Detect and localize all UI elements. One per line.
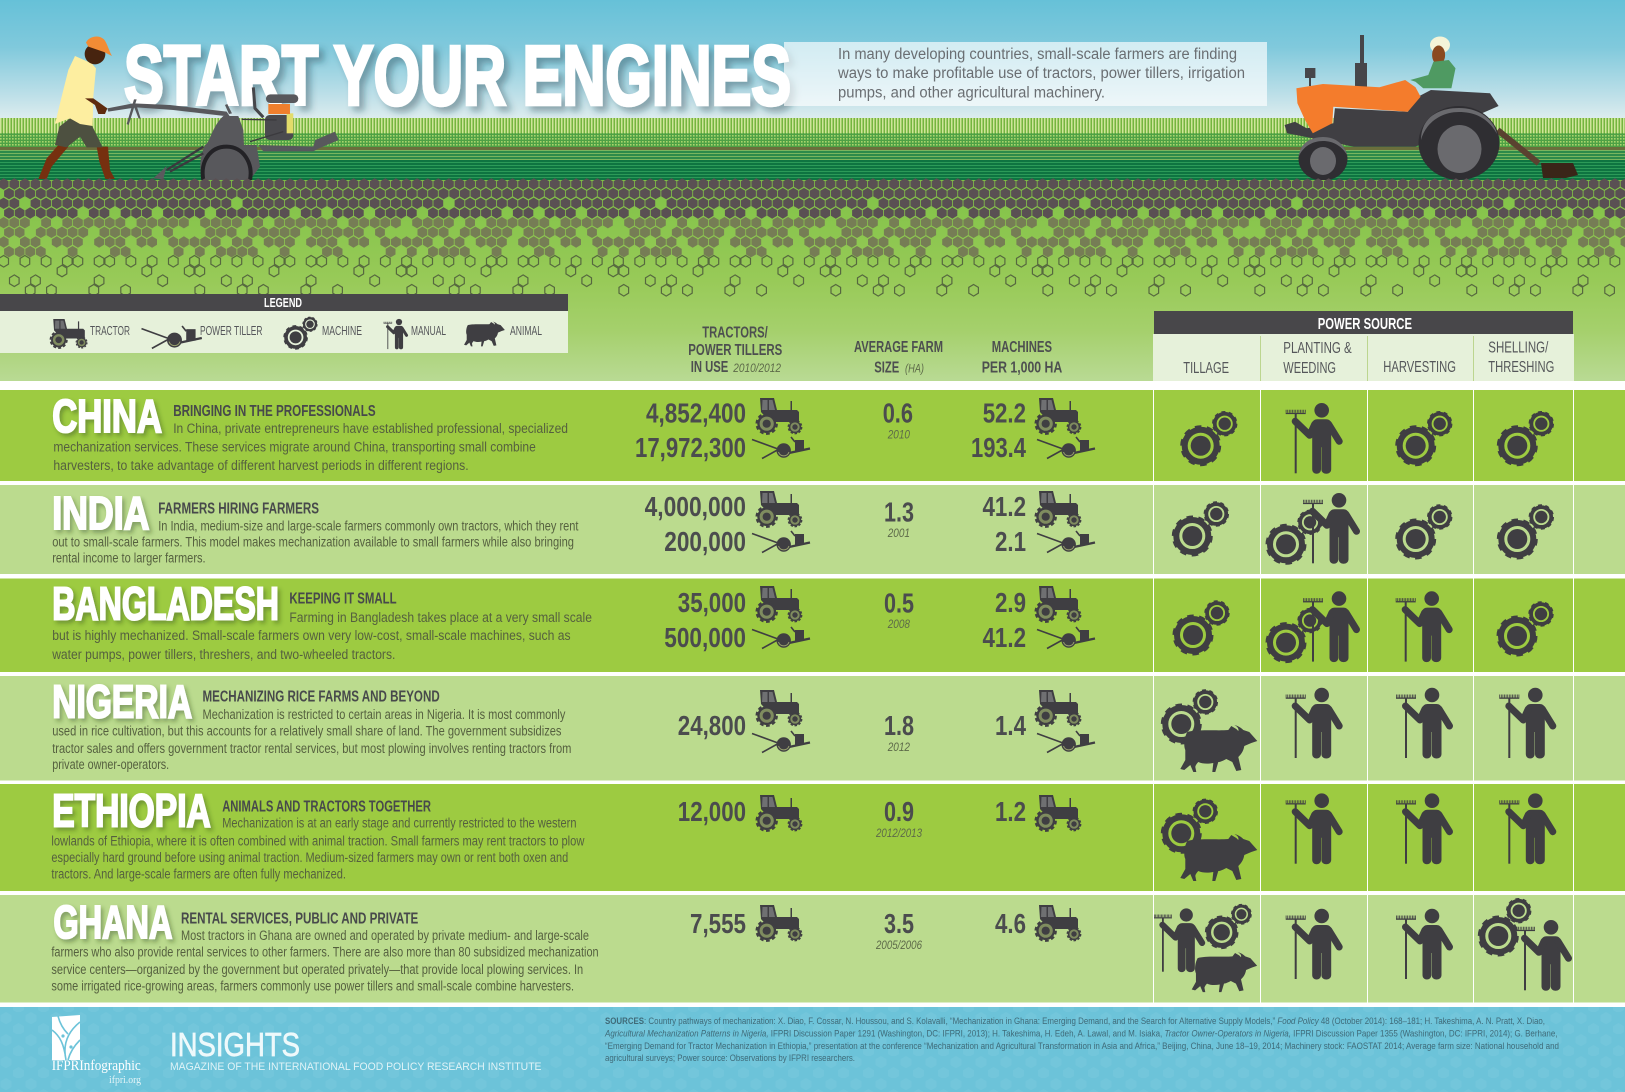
panel: ghana [0, 895, 1625, 1002]
intro text block [784, 42, 1267, 106]
china name: CHINA [52, 390, 162, 442]
column heading: tractors and power tillers: 2010/2012 [732, 361, 781, 375]
ghana farm size [875, 908, 922, 952]
nigeria body text: private owner-operators. [52, 757, 169, 772]
title: START YOUR ENGINES [124, 28, 791, 122]
india body text: out to small-scale farmers. This model makes mechanization available to small farmers while also bringing [52, 535, 574, 550]
column: harvesting: HARVESTING [1383, 359, 1456, 376]
legend: machine [284, 317, 362, 349]
column heading: average farm size: SIZE [874, 359, 900, 376]
farmer with power tiller [38, 36, 339, 180]
column heading: average farm size: (HA) [905, 361, 924, 375]
column: planting and weeding: PLANTING & [1283, 340, 1352, 357]
india name: INDIA [52, 487, 150, 539]
china body text: harvesters, to take advantage of different harvest periods in different regions. [53, 458, 469, 473]
china machines per ha: 52.2 [983, 398, 1026, 429]
bangladesh body text: but is highly mechanized. Small-scale farmers own very low-cost, small-scale machines, such as [52, 628, 571, 643]
column: planting and weeding: WEEDING [1283, 360, 1336, 377]
ethiopia name: ETHIOPIA [52, 785, 211, 837]
intro text block: ways to make profitable use of tractors, power tillers, irrigation [837, 65, 1245, 82]
bangladesh tillers number [664, 622, 810, 653]
column heading: tractors and power tillers: POWER TILLERS [688, 342, 783, 359]
panel: nigeria [0, 676, 1625, 780]
nigeria farm size: 2012 [887, 740, 910, 754]
china farm size: 0.6 [883, 398, 913, 429]
ethiopia machines per ha: 1.2 [995, 796, 1026, 827]
ghana heading: RENTAL SERVICES, PUBLIC AND PRIVATE [181, 910, 419, 927]
power source title: POWER SOURCE [1318, 316, 1412, 333]
india farm size: 1.3 [884, 496, 914, 528]
bangladesh power source icons [1174, 591, 1553, 662]
tiller engine [265, 115, 293, 140]
nigeria farm size: 1.8 [884, 710, 914, 741]
icon: farmer legs [38, 145, 115, 179]
intro text block: pumps, and other agricultural machinery. [838, 84, 1105, 102]
ethiopia heading: ANIMALS AND TRACTORS TOGETHER [222, 799, 431, 816]
legend: machine: MACHINE [322, 324, 362, 338]
column heading: average farm size: AVERAGE FARM [854, 339, 943, 356]
crop field stripes [0, 118, 1625, 182]
column heading: machines per 1,000 ha [982, 339, 1063, 376]
footer [0, 1007, 1625, 1092]
china machines per ha [971, 398, 1095, 463]
nigeria body text: Mechanization is restricted to certain areas in Nigeria. It is most commonly [202, 707, 566, 722]
column: planting and weeding [1283, 340, 1352, 377]
bangladesh tillers number: 500,000 [664, 622, 746, 653]
panel: china [0, 390, 1625, 481]
china body text [53, 421, 568, 473]
china tractors number [646, 398, 802, 434]
icon: farmer shirt [55, 56, 96, 126]
legend: power tiller: POWER TILLER [200, 324, 262, 338]
china heading: BRINGING IN THE PROFESSIONALS [173, 403, 376, 420]
ethiopia machines per ha [995, 795, 1081, 831]
sources text [604, 1016, 1559, 1064]
ethiopia farm size: 0.9 [884, 796, 914, 827]
front wheel [1298, 137, 1348, 181]
ghana tractors number: 7,555 [690, 908, 746, 939]
bangladesh tractors number: 35,000 [678, 587, 746, 618]
china farm size: 2010 [887, 427, 910, 441]
india tillers number [664, 526, 810, 557]
china machines per ha: 193.4 [971, 432, 1026, 463]
bangladesh machines per ha [982, 586, 1095, 653]
ethiopia power source icons [1162, 793, 1553, 881]
legend: manual: MANUAL [411, 324, 446, 338]
china farm size [883, 398, 913, 441]
bangladesh body text: Farming in Bangladesh takes place at a very small scale [289, 610, 592, 625]
india tractors number [645, 491, 802, 527]
india machines per ha: 2.1 [995, 526, 1026, 557]
bangladesh body text: water pumps, power tillers, threshers, and two-wheeled tractors. [51, 647, 395, 662]
sources text: Agricultural Mechanization Patterns in Nigeria, IFPRI Discussion Paper 1291 (Washington, DC: IFPRI, 2013); H. Takeshima, H. Edeh, A. Lawal, and M. Isiaka, Tractor Owner-Operators in Nigeria, IFPRI Discussion Paper 1355 (Washington, DC: IFPRI, 2014); G. Berhane, [604, 1028, 1558, 1040]
sources text: SOURCES: Country pathways of mechanization: X. Diao, F. Cossar, N. Houssou, and S. Kolavalli, “Mechanization in Ghana: Emerging Demand, and the Search for Alternative Supply Models,” Food Policy 48 (October 2014): 168–181; H. Takeshima, A. N. Pratt, X. Diao, [605, 1016, 1545, 1027]
ghana farm size: 3.5 [884, 908, 914, 939]
nigeria body text [52, 707, 571, 772]
panel: bangladesh [0, 578, 1625, 672]
bangladesh body text [51, 610, 592, 662]
ghana body text: farmers who also provide rental services to other farmers. There are also more than 80 subsidized mechanization [51, 945, 599, 960]
icon: IFPRI logo [52, 1015, 80, 1060]
ethiopia tractors number [678, 795, 802, 831]
ghana body text: service centers—organized by the government but operated privately—that provide local plowing services. In [51, 962, 583, 977]
column heading: tractors and power tillers: TRACTORS/ [702, 325, 768, 342]
panel: india [0, 485, 1625, 574]
ghana tractors number [690, 905, 802, 941]
sky background [0, 0, 1625, 118]
column heading: tractors and power tillers: IN USE [691, 359, 729, 376]
column: shelling and threshing [1488, 339, 1554, 376]
tiller handle [107, 99, 232, 125]
china tillers number: 17,972,300 [635, 432, 746, 463]
india farm size: 2001 [887, 526, 910, 540]
nigeria body text: used in rice cultivation, but this accounts for a relatively small share of land. The government subsidizes [52, 724, 562, 739]
ethiopia farm size [875, 796, 922, 840]
nigeria heading: MECHANIZING RICE FARMS AND BEYOND [202, 689, 440, 706]
legend: power tiller [142, 324, 262, 348]
legend: tractor: TRACTOR [90, 324, 130, 338]
IFPRI infographic wordmark: IFPRInfographic [52, 1058, 141, 1074]
india farm size [884, 496, 914, 540]
legend: animal: ANIMAL [510, 324, 542, 338]
column heading: machines per 1,000 ha: PER 1,000 HA [982, 359, 1063, 376]
column: tillage: TILLAGE [1183, 360, 1229, 377]
column heading: tractors and power tillers [688, 325, 783, 376]
ethiopia tractors number: 12,000 [678, 796, 746, 827]
bangladesh farm size: 0.5 [884, 588, 914, 618]
china body text: In China, private entrepreneurs have established professional, specialized [173, 421, 568, 436]
india body text [52, 519, 579, 566]
rear wheel [1418, 106, 1500, 180]
legend: manual [384, 319, 446, 349]
nigeria machines per ha: 1.4 [995, 710, 1026, 741]
icon: farmer hat [86, 36, 112, 56]
bangladesh machines per ha: 2.9 [995, 587, 1026, 618]
soil band with hexagon pattern [0, 178, 1625, 381]
india heading: FARMERS HIRING FARMERS [158, 500, 319, 517]
tractor hood [1296, 80, 1421, 133]
india body text: rental income to larger farmers. [52, 551, 206, 566]
column heading: machines per 1,000 ha: MACHINES [992, 339, 1052, 356]
icon: farmer arm [85, 98, 107, 114]
tractor with driver [1285, 35, 1578, 181]
nigeria farm size [884, 710, 914, 754]
ethiopia body text: especially hard ground before using animal traction. Medium-sized farmers may own or rent both oxen and [51, 850, 568, 865]
ghana body text: Most tractors in Ghana are owned and operated by private medium- and large-scale [181, 928, 589, 943]
bangladesh heading: KEEPING IT SMALL [289, 591, 397, 608]
INSIGHTS wordmark: INSIGHTS [170, 1026, 300, 1063]
legend: tractor [50, 319, 130, 348]
plow [1498, 130, 1539, 163]
icon: farmer head [85, 44, 105, 64]
magazine tagline: MAGAZINE OF THE INTERNATIONAL FOOD POLICY RESEARCH INSTITUTE [170, 1061, 542, 1073]
ethiopia body text [51, 816, 585, 882]
china tractors number: 4,852,400 [646, 398, 746, 429]
india machines per ha: 41.2 [982, 491, 1026, 522]
ghana machines per ha [995, 905, 1081, 941]
nigeria tractors number: 24,800 [678, 710, 746, 741]
nigeria name: NIGERIA [52, 676, 192, 728]
ghana body text [51, 928, 599, 994]
sources text: agricultural surveys; Power source: Observations by IFPRI researchers. [605, 1053, 855, 1064]
china power source icons [1182, 403, 1553, 474]
bangladesh farm size: 2008 [887, 617, 910, 631]
column: shelling and threshing: SHELLING/ [1488, 339, 1549, 356]
column heading: average farm size [854, 339, 943, 376]
india tractors number: 4,000,000 [645, 491, 746, 522]
ghana name: GHANA [53, 896, 172, 948]
column: shelling and threshing: THRESHING [1488, 359, 1554, 376]
nigeria power source icons [1162, 688, 1553, 772]
ethiopia body text: tractors. And large-scale farmers are often fully mechanized. [51, 867, 346, 882]
ifpri.org: ifpri.org [109, 1074, 141, 1086]
tractor body [1285, 90, 1499, 147]
legend heading: LEGEND [264, 296, 302, 310]
nigeria body text: tractor sales and offers government tractor rental services, but most plowing involves renting tractors from [52, 741, 571, 756]
bangladesh machines per ha: 41.2 [982, 622, 1026, 653]
india machines per ha [982, 491, 1095, 557]
bangladesh farm size [884, 588, 914, 631]
legend [0, 294, 568, 353]
ethiopia body text: Mechanization is at an early stage and currently restricted to the western [222, 816, 576, 831]
india tillers number: 200,000 [664, 526, 746, 557]
tiller wheel and fender [200, 116, 260, 180]
bangladesh name: BANGLADESH [52, 578, 279, 630]
tiller brace [167, 147, 203, 172]
ghana power source icons [1154, 899, 1568, 992]
tiller rear plate [258, 132, 339, 151]
ghana machines per ha: 4.6 [995, 908, 1026, 939]
india body text: In India, medium-size and large-scale farmers commonly own tractors, which they rent [158, 519, 579, 534]
nigeria machines per ha [995, 690, 1095, 752]
power source header [1153, 311, 1574, 381]
bangladesh tractors number [678, 586, 802, 622]
china body text: mechanization services. These services migrate around China, transporting small combine [53, 439, 536, 454]
legend: animal [464, 321, 542, 346]
india power source icons [1173, 493, 1553, 564]
driver [1430, 36, 1450, 54]
icon: farmer shorts [55, 118, 103, 147]
panel: ethiopia [0, 784, 1625, 891]
ethiopia farm size: 2012/2013 [875, 826, 922, 840]
table column dividers [1153, 390, 1574, 1003]
intro text block: In many developing countries, small-scale farmers are finding [838, 46, 1237, 63]
nigeria tractors number [678, 690, 810, 752]
ghana farm size: 2005/2006 [875, 938, 922, 952]
exhaust and mirror [1305, 35, 1367, 87]
ethiopia body text: lowlands of Ethiopia, where it is often combined with animal traction. Small farmers may rent tractors to plow [51, 834, 585, 849]
ghana body text: some irrigated rice-growing areas, farmers commonly use power tillers and small-scale combine harvesters. [51, 979, 574, 994]
